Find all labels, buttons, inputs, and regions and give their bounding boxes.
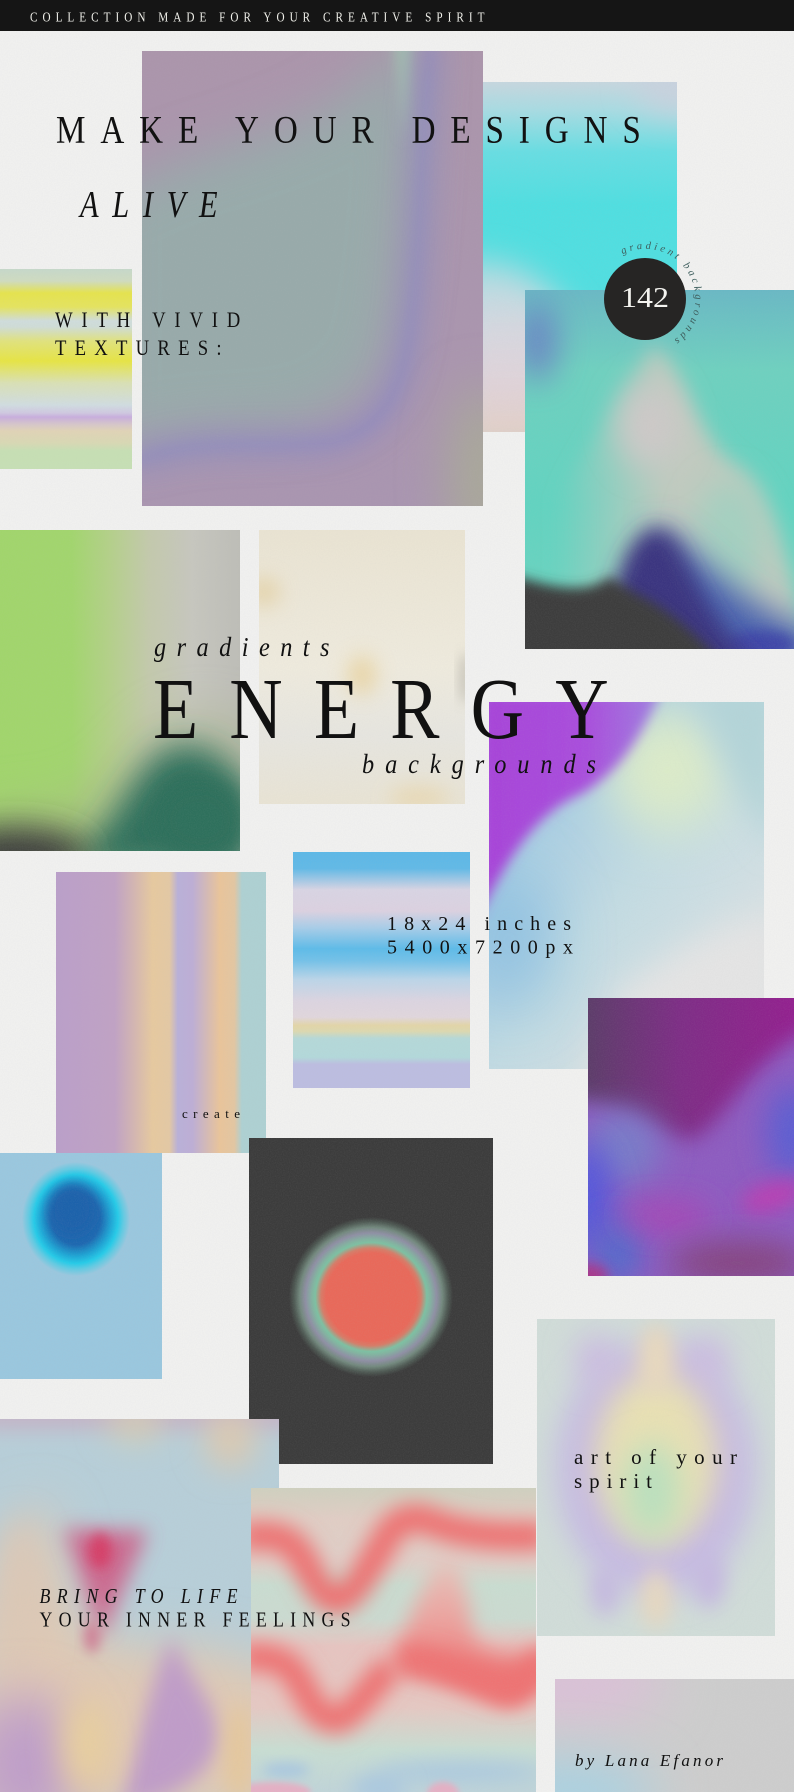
text: bring to life your inner feelings xyxy=(40,1586,351,1632)
panel: horizontal blue stripes card xyxy=(293,852,470,1088)
panel: dark card with coral orb xyxy=(249,1138,493,1464)
text: backgrounds: backgrounds xyxy=(362,749,596,779)
text: author credit: by Lana Efanor xyxy=(575,1751,723,1770)
text: art of your spirit xyxy=(574,1445,737,1493)
text: bring to life your inner feelings: BRING TO LIFE xyxy=(40,1586,238,1608)
panel: soft grey card xyxy=(555,1679,794,1792)
subheading: with vivid textures: TEXTURES: xyxy=(55,337,222,360)
text: gradients: gradients xyxy=(154,632,330,662)
panel: cyan gradient card xyxy=(483,82,677,432)
text: bring to life your inner feelings: YOUR INNER FEELINGS xyxy=(40,1609,351,1632)
heading: alive: ALIVE xyxy=(78,184,218,226)
panel: red wave card xyxy=(251,1488,536,1792)
panel: iridescent pastel card xyxy=(537,1319,775,1636)
panel: blue orb card xyxy=(0,1153,162,1379)
panel: yellow striped card xyxy=(0,269,132,469)
panel: green and dark hill card xyxy=(0,530,240,851)
panel: pastel card with crimson triangle xyxy=(0,1419,279,1792)
panel: tall violet gradient card xyxy=(142,51,483,506)
panel: magenta and blue card xyxy=(588,998,794,1276)
text: create: create xyxy=(182,1106,240,1121)
badge: 142 gradient backgrounds: gradient backgrounds xyxy=(622,242,702,344)
badge: 142 gradient backgrounds: 142 xyxy=(621,283,669,314)
banner text: COLLECTION MADE FOR YOUR CREATIVE SPIRIT xyxy=(30,9,485,25)
text: size specification: 18x24 inches xyxy=(387,913,571,935)
panel: cream marble card xyxy=(259,530,465,804)
top banner xyxy=(0,0,794,31)
panel: teal mountain card xyxy=(525,290,794,649)
title: energy: ENERGY xyxy=(153,661,609,757)
text: size specification xyxy=(387,913,573,958)
text: art of your spirit: art of your xyxy=(574,1445,737,1469)
subheading: with vivid textures xyxy=(55,309,240,360)
subheading: with vivid textures: WITH VIVID xyxy=(55,309,240,332)
heading: make your designs: MAKE YOUR DESIGNS xyxy=(56,108,641,151)
panel: purple and pale blue card xyxy=(489,702,764,1069)
text: art of your spirit: spirit xyxy=(574,1469,652,1493)
panel: vertical pastel stripes card xyxy=(56,872,266,1153)
text: size specification: 5400x7200px xyxy=(387,936,573,958)
